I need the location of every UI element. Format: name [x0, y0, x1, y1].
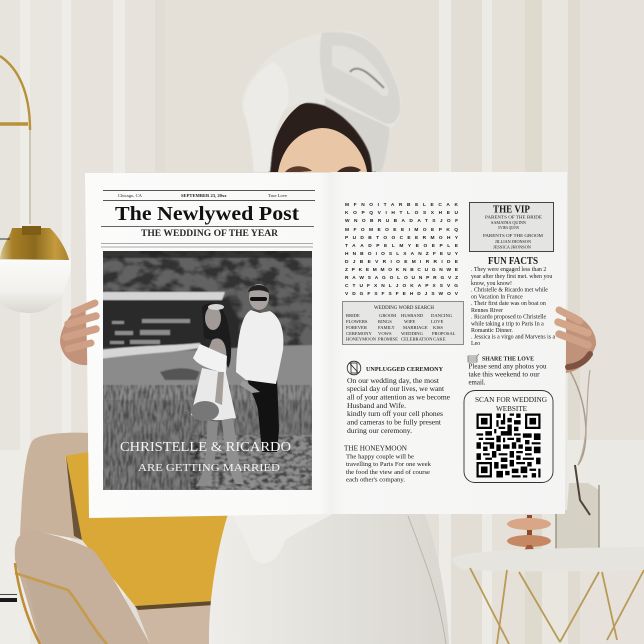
fun facts: Leo: [471, 341, 480, 347]
word search grid: MFNOITARBELECAK: [345, 202, 459, 208]
VIP box: [470, 202, 554, 252]
fun facts: Rennes River: [471, 308, 503, 314]
word search box: BRIDE: [346, 313, 360, 318]
newspaper title: The Newlywed Post: [115, 203, 299, 225]
masthead: [101, 190, 315, 247]
the honeymoon: [344, 444, 432, 484]
names overlay: [120, 442, 290, 471]
word search box: WEDDING: [401, 331, 424, 336]
unplugged ceremony: UNPLUGGED CEREMONY: [366, 366, 443, 373]
VIP box: PARENTS OF THE GROOM: [483, 233, 543, 238]
word search box: FOREVER: [346, 325, 368, 330]
unplugged ceremony: special day of our lives, we want: [347, 385, 444, 393]
pendant lamp: [0, 56, 71, 313]
fun facts: . They were engaged less than 2: [471, 267, 546, 273]
word search box: CAKE: [433, 336, 446, 342]
fun facts: . Jessica is a virgo and Marvens is a: [471, 334, 556, 340]
word search grid: HNBOIOSLXANZFEUY: [345, 251, 459, 257]
QR card: SCAN FOR WEDDING: [475, 396, 547, 404]
share the love: email.: [468, 378, 486, 386]
word search grid: CTUFXNLJOKAPXSVG: [345, 283, 458, 289]
side table with vase: [452, 365, 644, 644]
the honeymoon: THE HONEYMOON: [344, 444, 407, 452]
page: left: [85, 173, 331, 518]
word search box: RINGS: [378, 319, 392, 324]
share the love: [468, 354, 547, 386]
fun facts: . Christelle & Ricardo met while: [471, 288, 548, 294]
word search grid: ZPKEMMOKNBCUGNWE: [345, 267, 459, 273]
word search box: KISS: [433, 325, 443, 330]
VIP box: JILLIAN JHONSON: [495, 240, 531, 244]
the honeymoon: The happy couple will be: [346, 454, 414, 460]
fun facts: year after they first met. when you: [471, 273, 552, 280]
dateline: SEPTEMBER 23, 20xx: [181, 193, 227, 198]
word search grid: PUDBTOOCEERMOHY: [345, 235, 459, 241]
woman: towel and forehead: [242, 31, 401, 172]
word search box: MARRIAGE: [403, 325, 428, 330]
page: right: [331, 172, 567, 514]
word search box: LOVE: [431, 319, 443, 324]
VIP box: PARENTS OF THE BRIDE: [485, 214, 542, 220]
fingers: left hand: [66, 303, 96, 349]
icon: no phone: [347, 361, 361, 375]
the honeymoon: each other's company.: [346, 476, 405, 484]
word search grid: [345, 202, 459, 297]
bathrobe: [209, 514, 449, 644]
word search grid: MFOMEOEEIMOEPKQ: [345, 227, 458, 233]
word search box: DANCING: [431, 313, 453, 318]
photo: couple: [100, 248, 315, 493]
the honeymoon: the food the view and of course: [346, 469, 430, 476]
dateline: Chicago, CA: [118, 193, 143, 199]
fun facts: on Vacation In France: [471, 294, 523, 300]
word search box: HUSBAND: [401, 313, 424, 318]
share the love: Please send any photos you: [468, 362, 547, 370]
fun facts: while taking a trip to Paris In a: [471, 322, 544, 328]
word search box: FLOWERS: [346, 319, 368, 324]
word search grid: DJBEVRIOEMIRRIDE: [345, 259, 459, 265]
share the love: take this weekend to our: [468, 370, 540, 378]
newspaper: [85, 172, 567, 518]
bride: [191, 303, 244, 486]
fun facts: Romantic Dinner.: [471, 328, 513, 334]
fun facts: know, you know!: [471, 281, 512, 287]
word search box: FAMILY: [378, 325, 395, 330]
fun facts: . Their first date was on boat on: [471, 300, 546, 307]
share the love: SHARE THE LOVE: [482, 356, 534, 362]
dateline: True Love: [268, 193, 287, 198]
fun facts: . Ricardo proposed to Christelle: [471, 314, 546, 320]
fingers: right hand: [558, 310, 590, 367]
VIP box: JESSICA JHONSON: [493, 246, 531, 250]
armchair with yellow cushion: [0, 433, 230, 644]
word search box: PROMISE: [378, 336, 398, 342]
QR code: [476, 414, 540, 478]
fun facts: [471, 255, 556, 347]
word search box: WIFE: [404, 319, 415, 324]
headline: THE WEDDING OF THE YEAR: [141, 229, 278, 239]
the honeymoon: travelling to Paris For one week: [346, 461, 432, 468]
word search grid: TAADPELMYEOEPLE: [345, 243, 459, 249]
word search box: [342, 302, 464, 344]
word search box: CEREMONY: [346, 331, 372, 336]
names overlay: CHRISTELLE & RICARDO: [120, 439, 291, 454]
VIP box: THE VIP: [493, 204, 530, 216]
unplugged ceremony: kindly turn off your cell phones: [347, 410, 443, 418]
unplugged ceremony: during our ceremony.: [347, 427, 412, 435]
groom: [236, 284, 283, 452]
unplugged ceremony: [347, 361, 450, 435]
word search grid: KOPQVIHTLOSXHEU: [345, 210, 459, 216]
unplugged ceremony: Husband and Wife.: [347, 402, 406, 410]
fun facts: FUN FACTS: [488, 255, 538, 267]
word search box: HONEYMOON: [346, 336, 377, 342]
icon: photos: [468, 354, 479, 362]
VIP box: OVIRA QUINN: [498, 226, 519, 230]
unplugged ceremony: and cameras to be fully present: [347, 418, 441, 426]
word search grid: WNOBRUBADATSJOF: [345, 218, 458, 224]
unplugged ceremony: all of your attention as we become: [347, 394, 450, 402]
word search grid: VDGFSFSFEHDJSWOV: [345, 291, 459, 297]
hand: left palm: [60, 304, 88, 365]
word search box: WEDDING WORD SEARCH: [374, 306, 434, 311]
QR card: [464, 390, 553, 482]
word search box: PROPOSAL: [432, 331, 456, 336]
hand: right palm: [565, 310, 596, 373]
QR card: WEBSITE: [496, 405, 527, 413]
word search box: VOWS: [378, 331, 392, 336]
word search box: CELEBRATION: [401, 336, 433, 342]
unplugged ceremony: On our wedding day, the most: [347, 377, 439, 385]
word search box: GROOM: [379, 313, 396, 318]
names overlay: ARE GETTING MARRIED: [138, 463, 280, 474]
word search grid: RAWSAGOLOUNPRGVZ: [345, 275, 458, 281]
VIP box: SAMATHA QUINN: [491, 221, 526, 225]
dateline: [118, 193, 287, 199]
